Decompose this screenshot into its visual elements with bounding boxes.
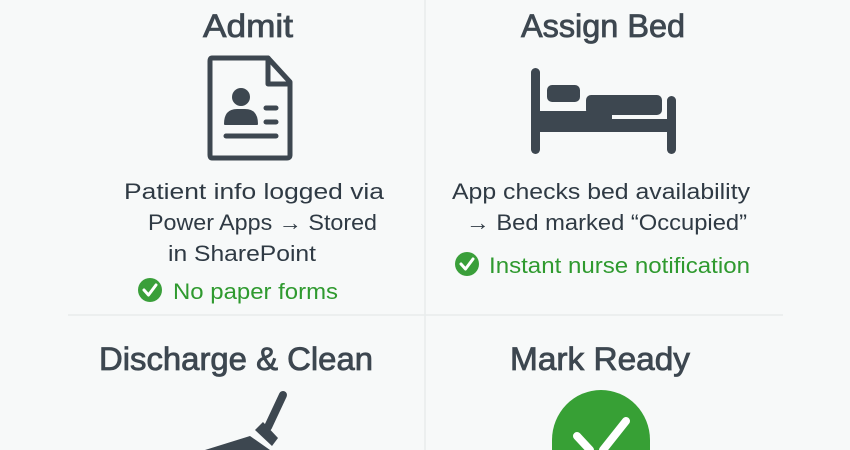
panel: admit <box>124 8 385 304</box>
icon: broom <box>205 395 283 450</box>
icon: bed <box>531 68 676 154</box>
panel: discharge & clean <box>99 341 373 450</box>
panel: mark ready <box>510 341 690 450</box>
heading: mark ready: Mark Ready <box>510 341 690 377</box>
text: assign bed description: → Bed marked “Occupied” <box>466 210 747 235</box>
text: admit description <box>124 179 385 266</box>
text: admit description: Power Apps → Stored <box>148 210 377 235</box>
text: admit description: Patient info logged via <box>124 179 385 204</box>
panel: assign bed <box>452 8 750 278</box>
text: assign bed description: App checks bed availability <box>452 179 750 204</box>
heading: discharge & clean: Discharge & Clean <box>99 341 373 377</box>
heading: assign bed: Assign Bed <box>521 8 685 44</box>
callout: no paper forms: No paper forms <box>173 279 338 304</box>
text: assign bed description <box>452 179 750 235</box>
callout: instant nurse notification: Instant nurse notification <box>489 253 750 278</box>
icon: document <box>210 58 290 158</box>
icon: green check circle <box>552 390 650 450</box>
heading: admit: Admit <box>203 8 293 44</box>
text: admit description: in SharePoint <box>168 241 316 266</box>
